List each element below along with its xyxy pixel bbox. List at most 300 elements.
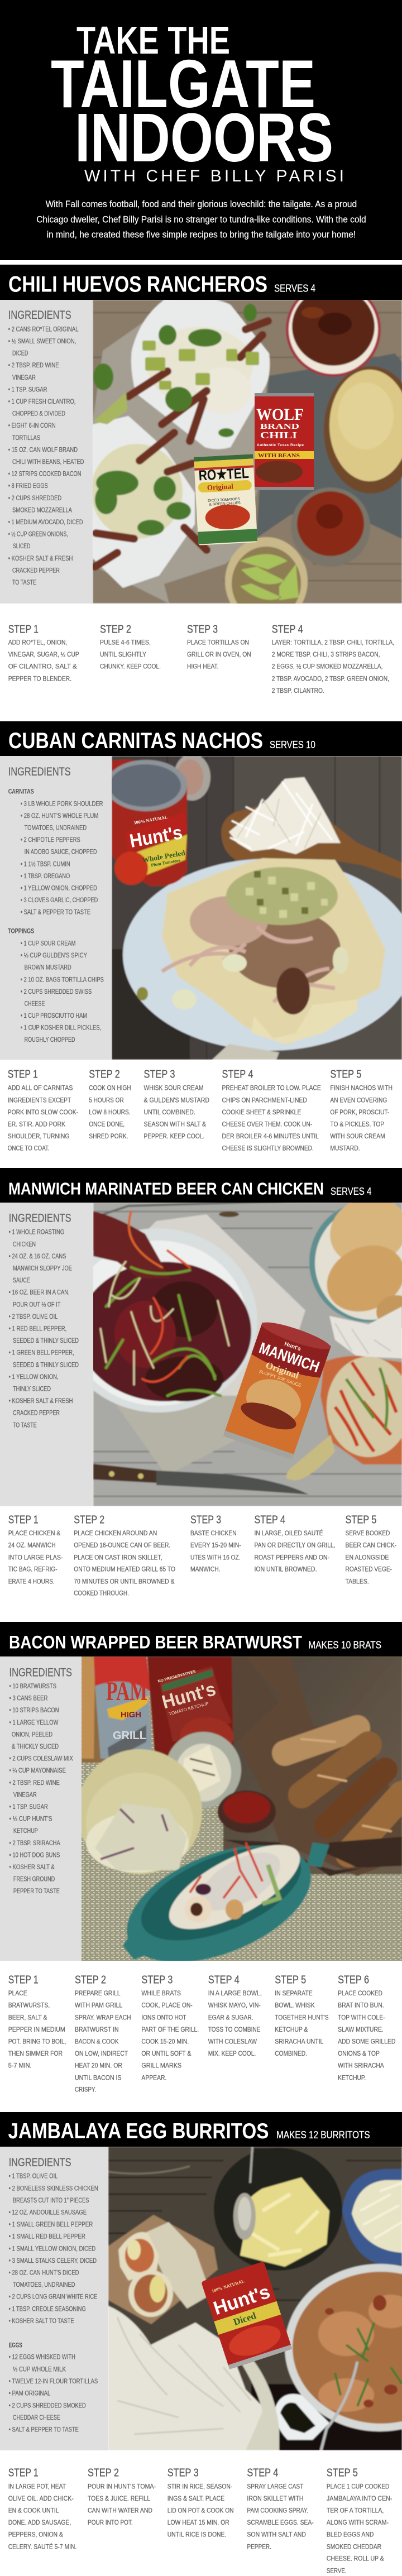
- carnitas subheading: CARNITAS: [8, 788, 34, 796]
- step 3: MANWICH.: [190, 1566, 221, 1573]
- ingredients list: THINLY SLICED: [13, 1386, 51, 1392]
- title bar: JAMBALAYA EGG BURRITOS: [8, 2119, 269, 2143]
- title bar: [0, 1168, 402, 1203]
- can label: Hunt's whole peeled: Whole Peeled: [141, 848, 186, 864]
- recipe 4: bacon wrapped beer bratwurst: [0, 1622, 402, 2094]
- eggs list: • PAM ORIGINAL: [9, 2390, 51, 2397]
- step 5: TABLES.: [345, 1578, 369, 1585]
- step 2: BRATWURST IN: [75, 2026, 118, 2033]
- ingredients list: POUR OUT ⅓ OF IT: [13, 1301, 60, 1308]
- ingredients list: • ¼ CUP MAYONNAISE: [9, 1767, 66, 1774]
- step 5: [275, 1974, 329, 2057]
- step 4: ION UNTIL BROWNED.: [255, 1566, 317, 1573]
- photo: bratwurst board and slaw: [77, 1656, 402, 1986]
- step 4: [255, 1514, 335, 1573]
- step 5: IN SEPARATE: [275, 1990, 313, 1997]
- step 5: TER OF A TORTILLA,: [327, 2507, 384, 2514]
- step 2: PULSE 4-6 TIMES,: [100, 639, 151, 647]
- step 5: ROASTED VEGE-: [345, 1566, 392, 1573]
- ingredients list: • 2 TBSP. OLIVE OIL: [9, 1313, 58, 1320]
- toppings list: • 2 CUPS SHREDDED SWISS: [21, 988, 92, 995]
- ingredients list: [9, 2173, 98, 2325]
- ingredients list: • 2 CANS RO*TEL ORIGINAL: [8, 325, 79, 333]
- title bar: MANWICH MARINATED BEER CAN CHICKEN: [8, 1179, 324, 1198]
- step 6: [338, 1974, 395, 2081]
- step 4: WHISK MAYO, VIN-: [208, 2002, 261, 2009]
- step 1: POT. BRING TO BOIL,: [8, 2038, 66, 2045]
- toppings list: • 1 CUP SOUR CREAM: [21, 940, 75, 947]
- step 3: BASTE CHICKEN: [190, 1530, 237, 1537]
- ingredients list: • 2 CUPS SHREDDED: [8, 495, 61, 502]
- ingredients heading: INGREDIENTS: [9, 1666, 72, 1679]
- step 5: SERVE BOOKED: [345, 1530, 390, 1537]
- step 1: STEP 1: [8, 624, 39, 636]
- step 4: PEPPER.: [247, 2543, 271, 2550]
- step 3: STIR IN RICE, SEASON-: [168, 2483, 232, 2490]
- step 2: UNTIL BACON IS: [75, 2074, 122, 2081]
- step 1: ERATE 4 HOURS.: [8, 1578, 55, 1585]
- ingredients list: • KOSHER SALT & FRESH: [8, 555, 73, 562]
- step 1: ER. STIR. ADD PORK: [8, 1121, 65, 1128]
- step 3: [141, 1974, 199, 2081]
- step 1: [8, 1069, 78, 1152]
- step 6: ADD SOME GRILLED: [338, 2038, 395, 2045]
- ingredients list: • 1 WHOLE ROASTING: [9, 1229, 64, 1236]
- bottle label: Hunt's ketchup: TOMATO KETCHUP: [168, 1701, 209, 1717]
- title bar: MAKES 12 BURRITOTS: [276, 2129, 370, 2141]
- can: Manwich: [223, 1318, 333, 1459]
- ingredients list: • 1 LARGE YELLOW: [9, 1719, 59, 1726]
- step 5: PLACE 1 CUP COOKED: [327, 2483, 389, 2490]
- can: Hunt's diced: Hunt's: [211, 2281, 272, 2319]
- step 1: TIC BAG. REFRIG-: [8, 1566, 58, 1573]
- step 5: BOWL, WHISK: [275, 2002, 315, 2009]
- step 1: SHOULDER, TURNING: [8, 1133, 69, 1140]
- step 3: STEP 3: [187, 624, 218, 636]
- ingredients list: DICED: [12, 350, 28, 357]
- step 4: WITH COLESLAW: [208, 2038, 257, 2045]
- step 5: FINISH NACHOS WITH: [330, 1085, 393, 1092]
- ingredients list: • ½ CUP GREEN ONIONS,: [8, 531, 68, 538]
- ingredients list: • 8 FRIED EGGS: [8, 482, 48, 490]
- carnitas list: [21, 800, 103, 916]
- step 4: DER BROILER 4-6 MINUTES UNTIL: [222, 1133, 319, 1140]
- title bar: SERVES 4: [331, 1185, 371, 1197]
- step 3: LOW HEAT 15 MIN. OR: [168, 2519, 229, 2526]
- step 1: INGREDIENTS EXCEPT: [8, 1097, 71, 1104]
- step 2: ONTO MEDIUM HEATED GRILL 65 TO: [74, 1566, 175, 1573]
- step 5: EN ALONGSIDE: [345, 1554, 389, 1561]
- intro paragraph: Chicago dweller, Chef Billy Parisi is no stranger to tundra-like conditions. With the cold: [36, 214, 366, 224]
- step 6: SLAW MIXTURE.: [338, 2026, 384, 2033]
- title: TAKE THE: [76, 18, 230, 62]
- step 3: PLACE TORTILLAS ON: [187, 639, 249, 647]
- ingredients list: • 2 TBSP. SRIRACHA: [9, 1840, 60, 1847]
- step 2: CHUNKY. KEEP COOL.: [100, 663, 161, 670]
- title bar: SERVES 4: [274, 283, 315, 294]
- step 1: VINEGAR, SUGAR, ½ CUP: [8, 651, 79, 658]
- step 1: DONE. ADD SAUSAGE,: [8, 2519, 71, 2526]
- step 5: STEP 5: [345, 1514, 376, 1526]
- step 3: APPEAR.: [141, 2074, 166, 2081]
- can: Wolf Brand Chili: WITH BEANS: [258, 453, 300, 458]
- ingredients list: • ½ SMALL SWEET ONION,: [8, 338, 76, 345]
- ingredients list: VINEGAR: [13, 1791, 37, 1798]
- step 1: [8, 1974, 66, 2070]
- step 2: POUR IN HUNT'S TOMA-: [88, 2483, 156, 2490]
- step 1: PLACE: [8, 1990, 27, 1997]
- can: Wolf Brand Chili: WOLF: [256, 405, 304, 424]
- eggs list: ⅓ CUP WHOLE MILK: [13, 2366, 66, 2373]
- step 3: UNTIL RICE IS DONE.: [168, 2531, 226, 2539]
- can: Ro*Tel: DICED TOMATOES: [208, 497, 241, 503]
- carnitas list: • 3 LB WHOLE PORK SHOULDER: [21, 800, 103, 807]
- can label: PAM: GRILL: [113, 1730, 146, 1742]
- can: Wolf Brand Chili: CHILI: [260, 430, 297, 440]
- step 5: KETCHUP &: [275, 2026, 308, 2033]
- ingredients heading: INGREDIENTS: [9, 2156, 71, 2169]
- step 3: COOK 15-20 MIN.: [141, 2038, 189, 2045]
- step 1: EN & COOK UNTIL: [8, 2507, 59, 2514]
- steps: [8, 1069, 393, 1152]
- ingredients list: [9, 1683, 73, 1895]
- carnitas list: • 28 OZ. HUNT'S WHOLE PLUM: [21, 812, 98, 820]
- step 4: COOKIE SHEET & SPRINKLE: [222, 1109, 302, 1116]
- photo: beer can chicken with rolls: [93, 1203, 402, 1506]
- ingredients list: [9, 1229, 79, 1429]
- step 1: THEN SIMMER FOR: [8, 2050, 63, 2057]
- step 1: ONCE TO COAT.: [8, 1145, 50, 1152]
- can: Ro*Tel: [194, 454, 257, 545]
- step 1: PORK INTO SLOW COOK-: [8, 1109, 78, 1116]
- steps: [8, 1974, 395, 2094]
- can: Wolf Brand Chili: [255, 393, 314, 490]
- step 2: [100, 624, 161, 670]
- ingredients list: • 3 CANS BEER: [9, 1695, 47, 1702]
- eggs list: • 12 EGGS WHISKED WITH: [9, 2354, 75, 2361]
- step 2: STEP 2: [88, 2467, 119, 2479]
- step 1: STEP 1: [8, 1974, 39, 1986]
- step 3: EVERY 15-20 MIN-: [190, 1542, 241, 1549]
- ingredients list: • 12 OZ. ANDOUILLE SAUSAGE: [9, 2209, 87, 2216]
- ingredients heading: INGREDIENTS: [8, 765, 71, 778]
- carnitas list: • SALT & PEPPER TO TASTE: [21, 909, 90, 916]
- step 5: OF PORK, PROSCIUT-: [330, 1109, 390, 1116]
- toppings list: [21, 940, 104, 1043]
- ingredients list: • 1 RED BELL PEPPER,: [9, 1325, 66, 1332]
- step 6: TOP WITH COLE-: [338, 2014, 385, 2021]
- step 1: STEP 1: [8, 1514, 39, 1526]
- ingredients list: • 1 SMALL YELLOW ONION, DICED: [9, 2245, 95, 2252]
- step 3: PEPPER. KEEP COOL.: [144, 1133, 204, 1140]
- eggs list: CHEDDAR CHEESE: [13, 2414, 60, 2421]
- ingredients list: • KOSHER SALT &: [9, 1864, 55, 1871]
- step 4: CHEESE IS SLIGHTLY BROWNED.: [222, 1145, 314, 1152]
- step 2: ON LOW, INDIRECT: [75, 2050, 128, 2057]
- eggs list: • TWELVE 12-IN FLOUR TORTILLAS: [9, 2378, 98, 2385]
- step 1: OLIVE OIL. ADD CHICK-: [8, 2495, 74, 2502]
- step 3: & GULDEN'S MUSTARD: [144, 1097, 209, 1104]
- step 2: TOES & JUICE. REFILL: [88, 2495, 150, 2502]
- step 3: OR UNTIL SOFT &: [141, 2050, 192, 2057]
- can: Hunt's diced: Diced: [232, 2310, 258, 2328]
- step 3: [190, 1514, 241, 1573]
- ingredients list: SLICED: [13, 543, 30, 550]
- step 2: [89, 1069, 131, 1140]
- step 2: WITH PAM GRILL: [75, 2002, 123, 2009]
- step 4: PAM COOKING SPRAY.: [247, 2507, 308, 2514]
- step 3: SEASON WITH SALT &: [144, 1121, 206, 1128]
- ingredients list: • 1 TSP. SUGAR: [9, 1803, 48, 1811]
- ingredients list: • 2 TBSP. RED WINE: [8, 362, 59, 369]
- ingredients list: KETCHUP: [13, 1827, 38, 1835]
- step 4: 2 TBSP. CILANTRO.: [272, 687, 324, 695]
- step 3: INGS & SALT. PLACE: [168, 2495, 224, 2502]
- step 4: IRON SKILLET WITH: [247, 2495, 303, 2502]
- step 1: BEER, SALT &: [8, 2014, 47, 2021]
- step 1: INTO LARGE PLAS-: [8, 1554, 63, 1561]
- can: Ro*Tel: RO★TEL: [198, 465, 250, 483]
- step 4: [272, 624, 394, 695]
- step 5: [330, 1069, 393, 1152]
- step 3: GRILL MARKS: [141, 2062, 181, 2070]
- step 4: PREHEAT BROILER TO LOW. PLACE: [222, 1085, 321, 1092]
- step 5: MUSTARD.: [330, 1145, 360, 1152]
- ingredients list: • 2 CUPS COLESLAW MIX: [9, 1755, 73, 1763]
- ingredients heading: INGREDIENTS: [8, 309, 71, 322]
- step 4: SCRAMBLE EGGS. SEA-: [247, 2519, 314, 2526]
- title: INDOORS: [75, 100, 333, 176]
- step 2: ONCE DONE,: [89, 1121, 125, 1128]
- ingredients list: TO TASTE: [13, 1421, 37, 1429]
- step 6: WITH SRIRACHA: [338, 2062, 384, 2070]
- step 1: PEPPER IN MEDIUM: [8, 2026, 65, 2033]
- ingredients list: [8, 325, 84, 586]
- step 5: STEP 5: [275, 1974, 306, 1986]
- toppings list: • 2 10 OZ. BAGS TORTILLA CHIPS: [21, 976, 104, 983]
- steps: [8, 1514, 396, 1597]
- step 3: WHISK SOUR CREAM: [144, 1085, 203, 1092]
- steps: [8, 2467, 393, 2574]
- step 3: LID ON POT & COOK ON: [168, 2507, 234, 2514]
- step 4: PAN OR DIRECTLY ON GRILL,: [255, 1542, 335, 1549]
- ingredients list: • 1 TSP. SUGAR: [8, 386, 47, 393]
- step 2: UNTIL SLIGHTLY: [100, 651, 146, 658]
- header panel: [0, 0, 402, 260]
- step 4: CHIPS ON PARCHMENT-LINED: [222, 1097, 307, 1104]
- step 2: [75, 1974, 131, 2094]
- ingredients panel: [0, 2147, 108, 2450]
- step 5: TO & PICKLES. TOP: [330, 1121, 384, 1128]
- carnitas list: • 1 1½ TBSP. CUMIN: [21, 860, 70, 868]
- title bar: CUBAN CARNITAS NACHOS: [8, 729, 263, 753]
- step 4: STEP 4: [255, 1514, 285, 1526]
- can label: Hunt's whole peeled: Hunt's: [128, 822, 184, 852]
- toppings list: • 1 CUP KOSHER DILL PICKLES,: [21, 1024, 101, 1032]
- step 3: PART OF THE GRILL.: [141, 2026, 199, 2033]
- ingredients list: • 1 SMALL RED BELL PEPPER: [9, 2233, 85, 2240]
- step 2: STEP 2: [75, 1974, 106, 1986]
- can label: PAM: [106, 1683, 147, 1739]
- bottle label: Hunt's ketchup: [157, 1670, 216, 1715]
- step 1: [8, 2467, 76, 2550]
- can label: Hunt's whole peeled: 100% NATURAL: [133, 815, 168, 826]
- step 2: STEP 2: [100, 624, 131, 636]
- step 1: BRATWURSTS,: [8, 2002, 50, 2009]
- can: Hunt's diced: [201, 2261, 292, 2369]
- can label: Hunt's whole peeled: Plum Tomatoes: [151, 858, 180, 868]
- step 3: STEP 3: [144, 1069, 175, 1081]
- bottle label: Hunt's ketchup: Hunt's: [160, 1678, 218, 1713]
- step 5: COMBINED.: [275, 2050, 307, 2057]
- carnitas list: • 1 YELLOW ONION, CHOPPED: [21, 884, 97, 892]
- step 5: JAMBALAYA INTO CEN-: [327, 2495, 393, 2502]
- step 1: [8, 624, 79, 682]
- ingredients panel: [0, 300, 93, 604]
- can: Hunt's diced: 100% NATURAL: [211, 2278, 245, 2293]
- ingredients list: • 2 CUPS LONG GRAIN WHITE RICE: [9, 2293, 98, 2301]
- step 3: STEP 3: [168, 2467, 199, 2479]
- step 1: PEPPER TO BLENDER.: [8, 675, 71, 682]
- ingredients list: • 3 SMALL STALKS CELERY, DICED: [9, 2257, 97, 2264]
- title: TAILGATE: [51, 46, 315, 122]
- can: Wolf Brand Chili: BRAND: [260, 423, 299, 431]
- ingredients list: • 10 BRATWURSTS: [9, 1683, 56, 1690]
- step 4: TOSS TO COMBINE: [208, 2026, 261, 2033]
- step 6: BRAT INTO BUN.: [338, 2002, 384, 2009]
- step 2: STEP 2: [89, 1069, 120, 1081]
- step 5: BLED EGGS AND: [327, 2531, 374, 2539]
- step 2: PREPARE GRILL: [75, 1990, 121, 1997]
- ingredients list: FRESH GROUND: [13, 1876, 55, 1883]
- can: Manwich: MANWICH: [257, 1339, 322, 1376]
- step 2: COOK ON HIGH: [89, 1085, 131, 1092]
- intro paragraph: With Fall comes football, food and their glorious lovechild: the tailgate. As a proud: [46, 199, 357, 209]
- step 2: [74, 1514, 175, 1597]
- step 4: EGAR & SUGAR.: [208, 2014, 253, 2021]
- ingredients list: • 28 OZ. CAN HUNT'S DICED: [9, 2269, 79, 2277]
- ingredients list: • 1 YELLOW ONION,: [9, 1373, 59, 1381]
- ingredients list: VINEGAR: [12, 374, 36, 381]
- ingredients list: CRACKED PEPPER: [12, 567, 60, 574]
- carnitas list: • 2 CHIPOTLE PEPPERS: [21, 836, 80, 844]
- steps: [8, 624, 394, 695]
- title bar: BACON WRAPPED BEER BRATWURST: [9, 1632, 302, 1653]
- title: [51, 18, 333, 176]
- toppings list: ROUGHLY CHOPPED: [25, 1036, 75, 1043]
- ingredients list: CHOPPED & DIVIDED: [12, 410, 65, 418]
- can: Wolf Brand Chili: Authentic Texas Recipe: [257, 443, 304, 447]
- step 3: IONS ONTO HOT: [141, 2014, 186, 2021]
- step 5: [345, 1514, 396, 1585]
- step 1: PEPPERS, ONION &: [8, 2531, 63, 2539]
- eggs list: [9, 2354, 98, 2433]
- eggs list: • SALT & PEPPER TO TASTE: [9, 2426, 79, 2433]
- step 1: 5-7 MIN.: [8, 2062, 31, 2070]
- carnitas list: IN ADOBO SAUCE, CHOPPED: [25, 849, 97, 856]
- step 1: [8, 1514, 63, 1585]
- step 4: IN LARGE, OILED SAUTÉ: [255, 1530, 323, 1537]
- ingredients list: TOMATOES, UNDRAINED: [13, 2281, 75, 2288]
- ingredients list: CHICKEN: [13, 1241, 36, 1248]
- step 2: CRISPY.: [75, 2086, 96, 2094]
- step 5: ALONG WITH SCRAM-: [327, 2519, 389, 2526]
- step 2: STEP 2: [74, 1514, 104, 1526]
- title bar: [0, 721, 402, 756]
- step 2: SPRAY. WRAP EACH: [75, 2014, 131, 2021]
- step 5: [327, 2467, 393, 2574]
- toppings list: • ⅓ CUP GULDEN'S SPICY: [21, 952, 87, 959]
- ingredients list: TO TASTE: [12, 579, 36, 586]
- step 2: 70 MINUTES OR UNTIL BROWNED &: [74, 1578, 175, 1585]
- step 1: STEP 1: [8, 1069, 38, 1081]
- step 4: STEP 4: [247, 2467, 278, 2479]
- ingredients list: • 1 SMALL GREEN BELL PEPPER: [9, 2221, 93, 2228]
- ingredients heading: INGREDIENTS: [9, 1212, 71, 1225]
- eggs list: • 2 CUPS SHREDDED SMOKED: [9, 2402, 86, 2409]
- recipe 1: chili huevos rancheros: [0, 265, 402, 695]
- step 5: SMOKED CHEDDAR: [327, 2543, 381, 2550]
- ingredients list: SAUCE: [13, 1277, 30, 1284]
- step 3: UNTIL COMBINED.: [144, 1109, 195, 1116]
- ingredients list: • 1 CUP FRESH CILANTRO,: [8, 398, 75, 405]
- step 2: OPENED 16-OUNCE CAN OF BEER.: [74, 1542, 170, 1549]
- eggs subheading: EGGS: [9, 2342, 22, 2349]
- ingredients list: • 1 TBSP. CREOLE SEASONING: [9, 2305, 86, 2312]
- ingredients list: • 2 TBSP. RED WINE: [9, 1779, 60, 1787]
- can label: Hunt's whole peeled: [130, 816, 185, 866]
- step 4: CHEESE OVER THEM. COOK UN-: [222, 1121, 312, 1128]
- step 5: BEER CAN CHICK-: [345, 1542, 396, 1549]
- step 4: [247, 2467, 314, 2550]
- step 4: IN A LARGE BOWL,: [208, 1990, 262, 1997]
- title bar: [0, 1622, 402, 1656]
- can: Ro*Tel: & GREEN CHILIES: [209, 501, 241, 507]
- step 2: COOKED THROUGH.: [74, 1590, 129, 1597]
- step 1: ADD ALL OF CARNITAS: [8, 1085, 73, 1092]
- step 3: WHILE BRATS: [141, 1990, 181, 1997]
- title bar: CHILI HUEVOS RANCHEROS: [8, 272, 267, 297]
- ingredients list: • 10 STRIPS BACON: [9, 1707, 59, 1714]
- step 2: PLACE ON CAST IRON SKILLET,: [74, 1554, 162, 1561]
- ingredients list: TORTILLAS: [12, 434, 40, 442]
- photo: nachos with cheese and can: [106, 754, 402, 1060]
- ingredients list: BREASTS CUT INTO 1" PIECES: [13, 2197, 89, 2204]
- step 1: ADD RO*TEL, ONION,: [8, 639, 67, 647]
- step 2: PLACE CHICKEN AROUND AN: [74, 1530, 157, 1537]
- intro paragraph: in mind, he created these five simple recipes to bring the tailgate into your home!: [47, 230, 356, 240]
- ingredients list: SEEDED & THINLY SLICED: [13, 1337, 79, 1344]
- can: Manwich: SLOPPY JOE SAUCE: [259, 1369, 302, 1388]
- carnitas list: • 1 TBSP. OREGANO: [21, 873, 70, 880]
- step 4: SON WITH SALT AND: [247, 2531, 306, 2539]
- title bar: SERVES 10: [270, 739, 315, 750]
- step 3: [168, 2467, 234, 2539]
- ingredients list: • 1 TBSP. OLIVE OIL: [9, 2173, 58, 2180]
- ingredients list: • 12 STRIPS COOKED BACON: [8, 471, 82, 478]
- ingredients list: PEPPER TO TASTE: [13, 1888, 60, 1895]
- step 1: STEP 1: [8, 2467, 39, 2479]
- step 3: [187, 624, 251, 670]
- step 3: UTES WITH 16 OZ.: [190, 1554, 240, 1561]
- ingredients list: • 24 OZ. & 16 OZ. CANS: [9, 1253, 66, 1260]
- step 3: HIGH HEAT.: [187, 663, 219, 670]
- can label: PAM: PAM: [106, 1677, 147, 1706]
- ingredients list: • 15 OZ. CAN WOLF BRAND: [8, 446, 78, 453]
- recipe 5: jambalaya egg burritos: [0, 2112, 402, 2574]
- step 6: PLACE COOKED: [338, 1990, 382, 1997]
- toppings list: CHEESE: [25, 1000, 45, 1007]
